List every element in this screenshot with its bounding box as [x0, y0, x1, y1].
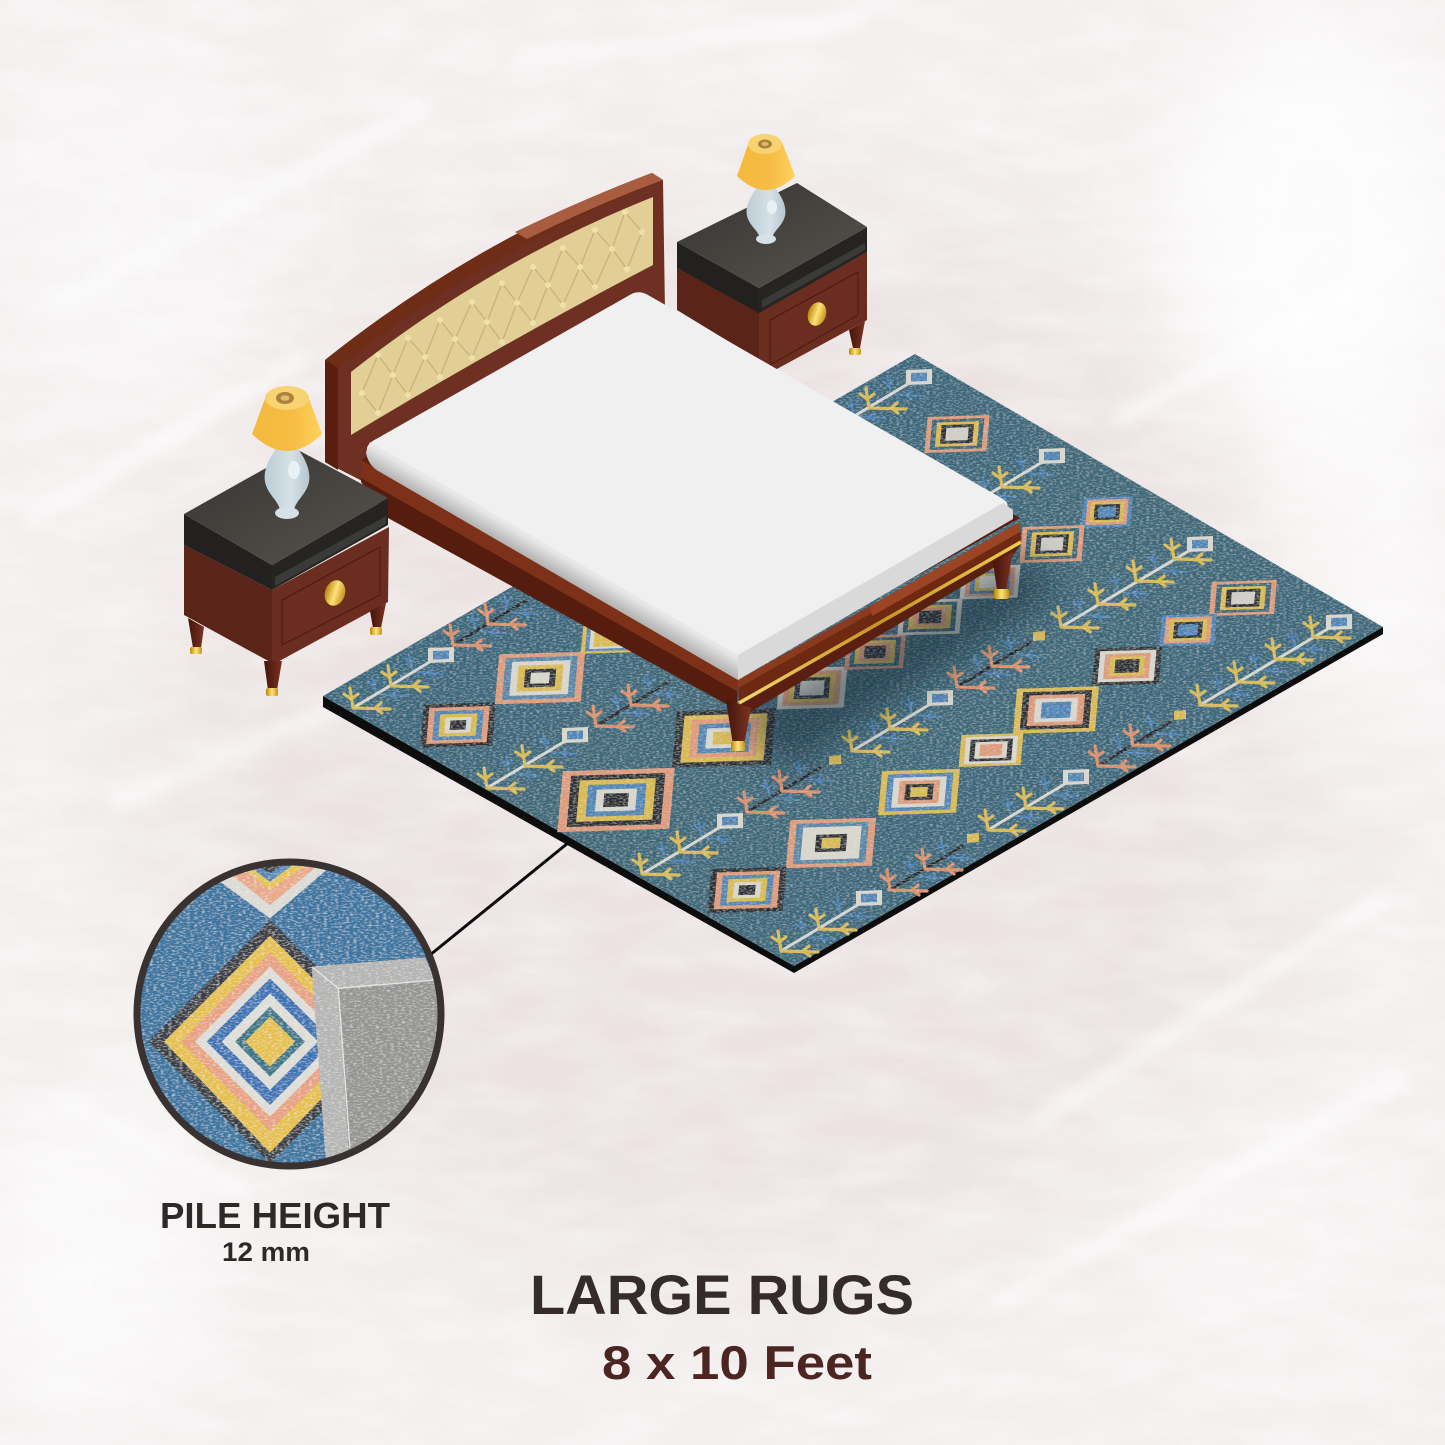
diamond motifs [420, 415, 1277, 913]
rug edge [323, 627, 1383, 973]
legs [188, 618, 204, 648]
drawer handle [805, 300, 829, 328]
size label: 8 x 10 Feet [602, 1336, 872, 1389]
mattress [366, 292, 1013, 680]
title: LARGE RUGS [530, 1263, 914, 1326]
gold trim [739, 542, 1021, 703]
right nightstand [677, 134, 867, 370]
label: pile height [160, 1195, 390, 1267]
label: pile height: 12 mm [222, 1237, 310, 1267]
lamp [252, 386, 322, 519]
front leg [726, 700, 751, 745]
tufted panel [351, 197, 653, 435]
label: pile height: PILE HEIGHT [160, 1195, 390, 1236]
headboard highlight [515, 173, 663, 239]
frame highlight [870, 522, 1020, 616]
mattress right side [738, 503, 1013, 680]
headboard [325, 173, 665, 486]
left nightstand [184, 386, 389, 696]
pile diamond [148, 920, 322, 1162]
lamp [737, 134, 795, 244]
drawer handle [321, 578, 349, 608]
bed frame [361, 300, 1021, 751]
folded corner [312, 957, 434, 1158]
chevron motif [220, 868, 326, 918]
mattress top [367, 292, 1007, 656]
connector line [430, 843, 568, 955]
leg [849, 321, 865, 348]
right leg [993, 552, 1013, 590]
stem motifs [344, 369, 1352, 956]
bed shadow on rug [740, 555, 1060, 770]
rug [323, 354, 1383, 973]
mattress front side [366, 442, 738, 680]
rug pile and pattern [323, 354, 1383, 966]
magnifier: pile height detail [134, 858, 444, 1170]
bed [325, 173, 1021, 751]
